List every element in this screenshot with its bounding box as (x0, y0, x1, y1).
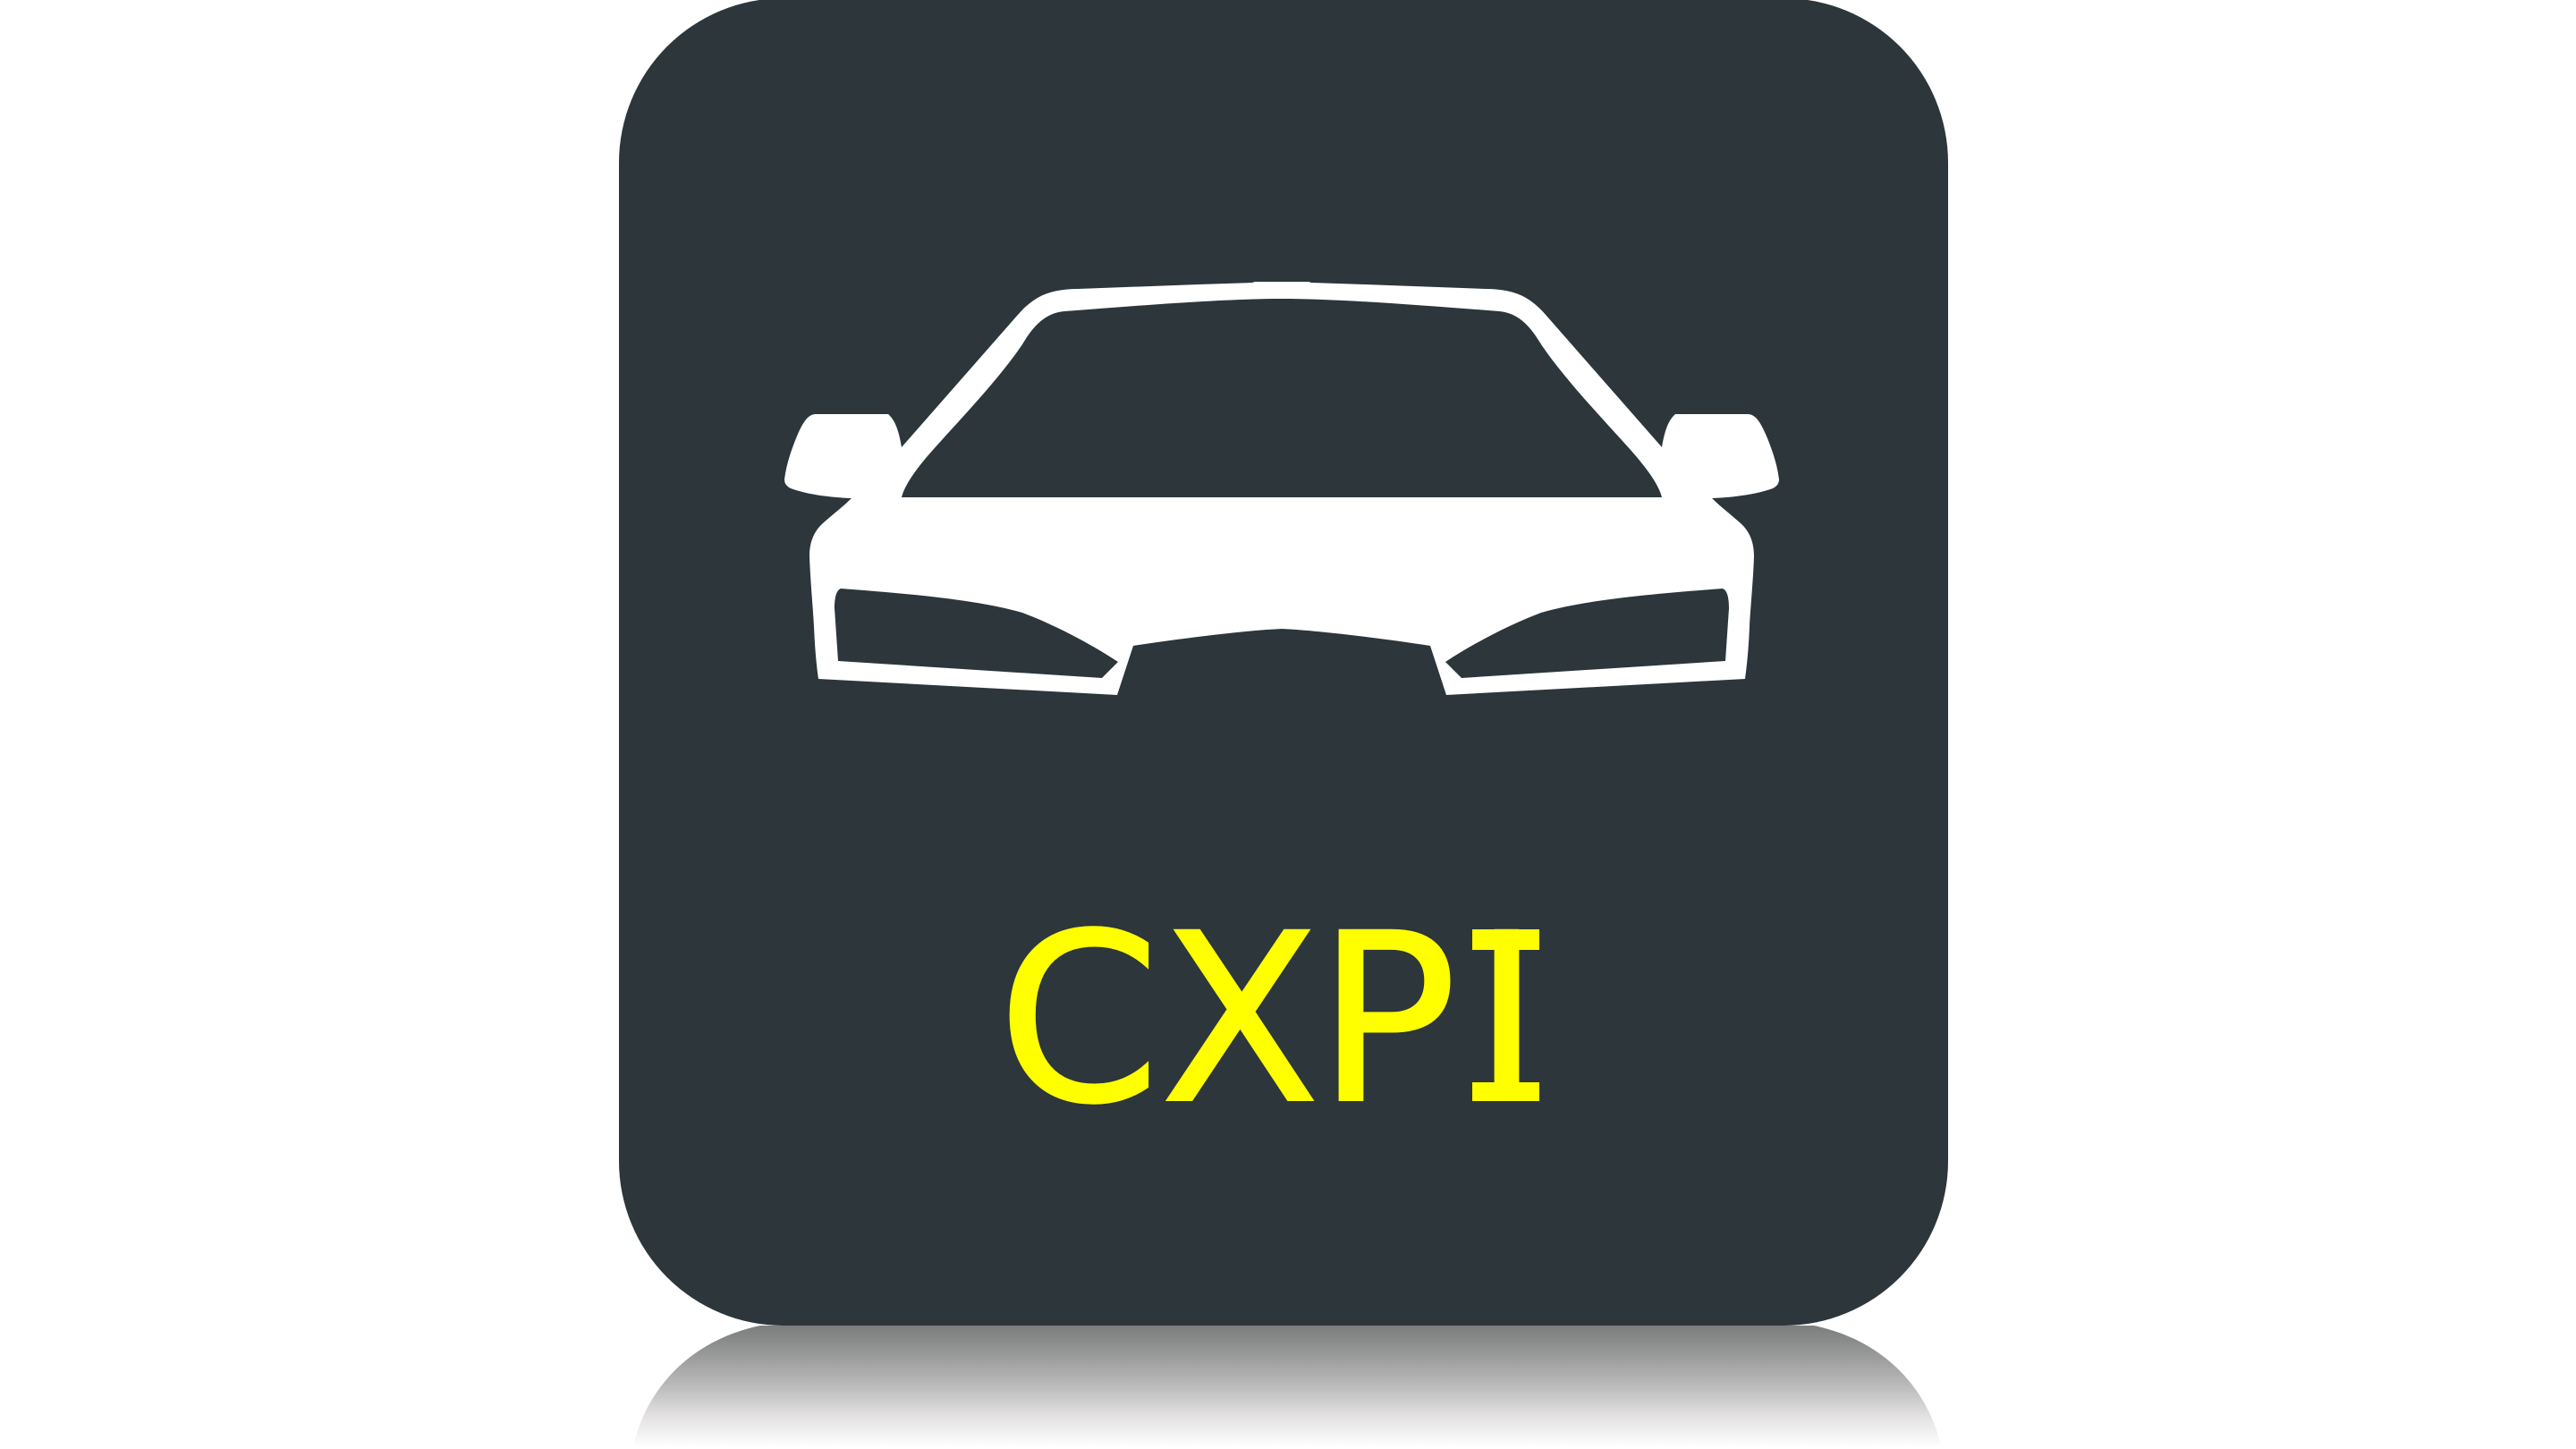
panel: app icon card (619, 0, 1948, 1326)
reflection under card (633, 1326, 1941, 1447)
icon: white car front view (784, 282, 1779, 695)
title: CXPI label: CXPI (997, 884, 1541, 1156)
